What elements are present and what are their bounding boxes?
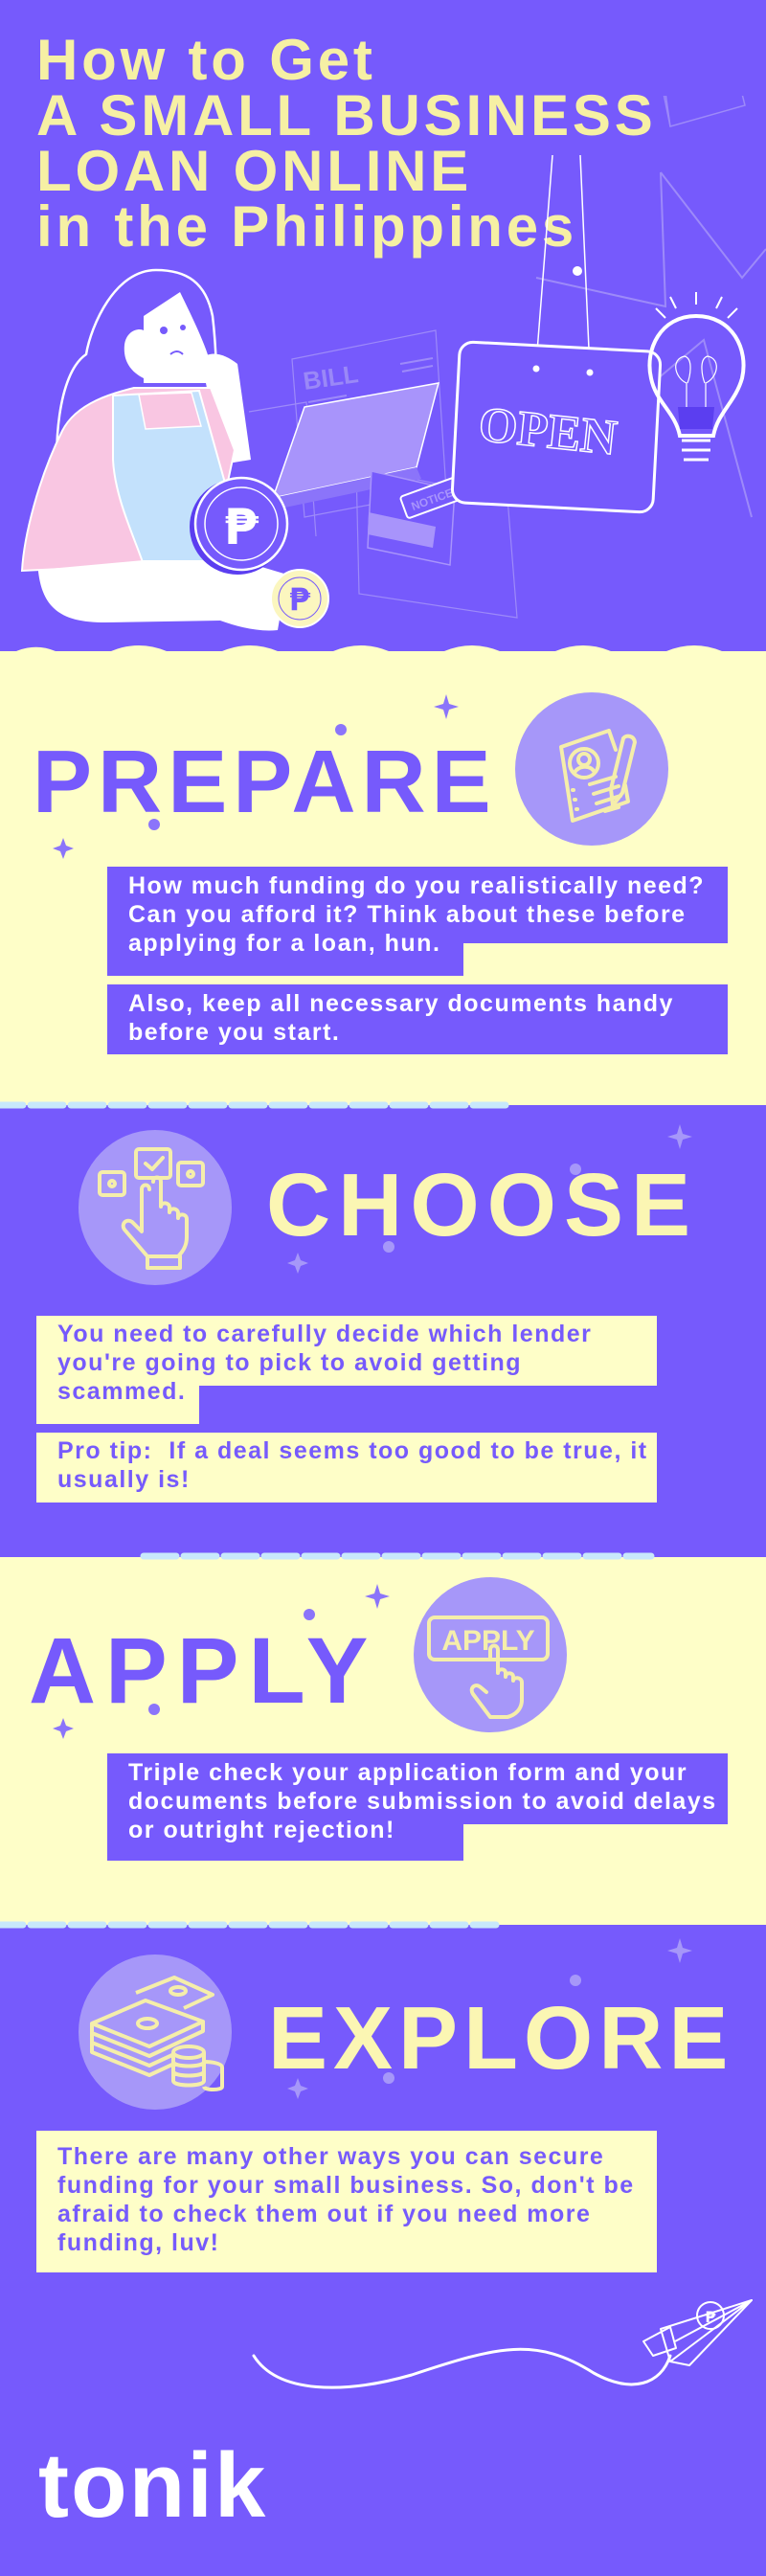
text box: choose: usually is!	[57, 1466, 191, 1493]
text box: choose: scammed.	[57, 1378, 186, 1405]
title	[36, 28, 657, 259]
text box: apply	[107, 1753, 728, 1861]
icon: document with pencil	[515, 692, 668, 846]
notice card	[368, 471, 455, 565]
heading: APPLY: APPLY	[29, 1618, 377, 1723]
hero illustration: NOTICE	[410, 486, 455, 513]
dashed dividers	[0, 1101, 509, 1109]
sparkles	[53, 694, 459, 859]
light bulb	[649, 292, 744, 460]
sparkles	[287, 1938, 691, 2099]
title: in the Philippines	[36, 194, 577, 259]
text box: choose	[36, 1316, 657, 1503]
section: choose	[36, 1124, 698, 1503]
text box: prepare: How much funding do you realistically need?	[128, 872, 705, 899]
sparkles	[287, 1124, 691, 1274]
big peso coin	[190, 478, 287, 575]
curve line with paper plane	[252, 2299, 753, 2389]
text box: prepare: applying for a loan, hun.	[128, 930, 440, 957]
hero illustration: BILL	[302, 359, 360, 395]
section: prepare	[33, 692, 728, 1054]
open sign: OPEN	[476, 397, 620, 466]
wave divider	[16, 645, 722, 651]
logo: tonik: tonik	[38, 2434, 267, 2537]
text box: choose: You need to carefully decide which lender	[57, 1321, 592, 1347]
heading: PREPARE: PREPARE	[33, 732, 497, 831]
text box: apply: documents before submission to avoid delays	[128, 1788, 717, 1815]
decorative notepad	[656, 36, 745, 126]
curve line with paper plane: ₱	[705, 2308, 716, 2326]
heading: CHOOSE: CHOOSE	[266, 1155, 698, 1254]
icon: money stack	[79, 1955, 232, 2110]
text box: prepare: Also, keep all necessary documents handy	[128, 990, 674, 1017]
text box: explore: There are many other ways you can secure	[57, 2143, 604, 2170]
text box: apply: or outright rejection!	[128, 1817, 395, 1843]
title: A SMALL BUSINESS	[36, 83, 657, 147]
background: yellow apply section	[0, 1557, 766, 1925]
woman	[22, 270, 287, 630]
text box: explore: funding for your small business. So, don't be	[57, 2172, 635, 2199]
icon: apply button with hand: APPLY	[441, 1625, 535, 1657]
text box: choose: Pro tip: If a deal seems too good to be true, it	[57, 1437, 648, 1464]
background: yellow prepare section	[0, 651, 766, 1105]
text box: explore: afraid to check them out if you need more	[57, 2201, 591, 2227]
text box: prepare	[107, 867, 728, 1054]
bill documents	[249, 330, 517, 618]
hero illustration	[21, 96, 766, 630]
section: explore	[36, 1938, 733, 2272]
text box: prepare: Can you afford it? Think about these before	[128, 901, 687, 928]
heading: EXPLORE: EXPLORE	[268, 1988, 733, 2088]
text box: explore: funding, luv!	[57, 2229, 219, 2256]
big peso coin: ₱	[224, 499, 259, 556]
open sign	[452, 155, 661, 512]
icon: hand choosing	[79, 1130, 232, 1285]
text box: choose: you're going to pick to avoid getting	[57, 1349, 522, 1376]
text box: explore	[36, 2131, 657, 2272]
text box: prepare: before you start.	[128, 1019, 340, 1046]
small yellow coin	[271, 570, 328, 627]
section: apply	[29, 1577, 728, 1861]
text box: apply: Triple check your application form and your	[128, 1759, 687, 1786]
title: LOAN ONLINE	[36, 139, 472, 203]
sparkles	[53, 1584, 390, 1739]
title: How to Get	[36, 28, 376, 92]
laptop	[273, 383, 439, 498]
icon: apply button with hand	[414, 1577, 567, 1732]
small yellow coin: ₱	[289, 581, 311, 618]
decorative star lines	[536, 172, 766, 517]
